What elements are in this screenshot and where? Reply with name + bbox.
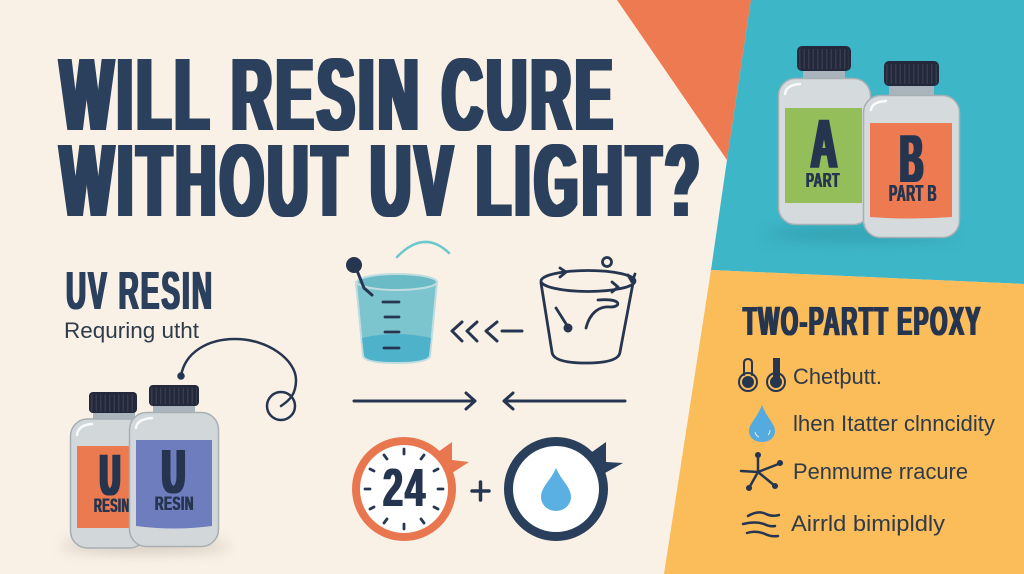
list item: water drop	[749, 405, 995, 442]
arrow: triple chevron pointing to beaker	[452, 322, 522, 341]
icon: mixing bucket	[541, 258, 635, 363]
shadow	[60, 539, 230, 553]
panel: orange triangle	[617, 0, 751, 160]
arrow: right-pointing	[354, 393, 475, 409]
plus sign	[472, 482, 489, 500]
icon: measuring beaker	[346, 242, 449, 363]
bottle: blue U resin: U	[162, 438, 185, 507]
bottle: orange U resin: RESIN	[94, 496, 130, 517]
panel: teal two-part bottles background	[711, 0, 1024, 284]
icon: curved cord	[178, 339, 296, 420]
bottle: orange U resin	[70, 392, 146, 548]
text: Airrld bimipldly	[791, 511, 945, 536]
list item: thermometers	[739, 358, 882, 391]
icon: 24 hour clock	[356, 441, 469, 537]
bottle: blue U resin	[130, 385, 218, 546]
bottle: part B	[864, 61, 960, 238]
icon: thermometers	[739, 358, 785, 391]
icon: air waves	[743, 512, 779, 536]
panel: yellow two-part epoxy background	[664, 270, 1024, 574]
shadow	[765, 227, 955, 241]
bottle: part A	[778, 46, 870, 224]
icon: water drop	[749, 405, 775, 442]
icon: 24 hour clock: 24	[383, 458, 427, 518]
bottle: orange U resin: U	[100, 443, 120, 508]
heading: UV resin: UV RESIN	[66, 261, 214, 321]
text: Penmume rracure	[793, 459, 968, 484]
list item: air waves	[743, 511, 945, 536]
bottle: part B: B	[900, 121, 923, 197]
bottles: two-part A and B	[765, 46, 960, 241]
icon: humidity dial with drop	[508, 442, 623, 536]
text: UV resin subtitle: Requring utht	[64, 318, 199, 343]
bottle: part B: PART B	[889, 180, 937, 206]
bottles: UV resin	[60, 385, 230, 553]
arrow: left-pointing	[504, 393, 625, 409]
title	[60, 37, 704, 238]
icon: node star	[741, 453, 782, 490]
text: lhen Itatter clnncidity	[793, 411, 995, 436]
bottle: part A: PART	[806, 170, 840, 192]
bottle: part A: A	[811, 105, 837, 183]
text: Chetþutt.	[793, 364, 882, 389]
list item: pressure node	[741, 453, 968, 490]
bottle: blue U resin: RESIN	[155, 494, 194, 515]
